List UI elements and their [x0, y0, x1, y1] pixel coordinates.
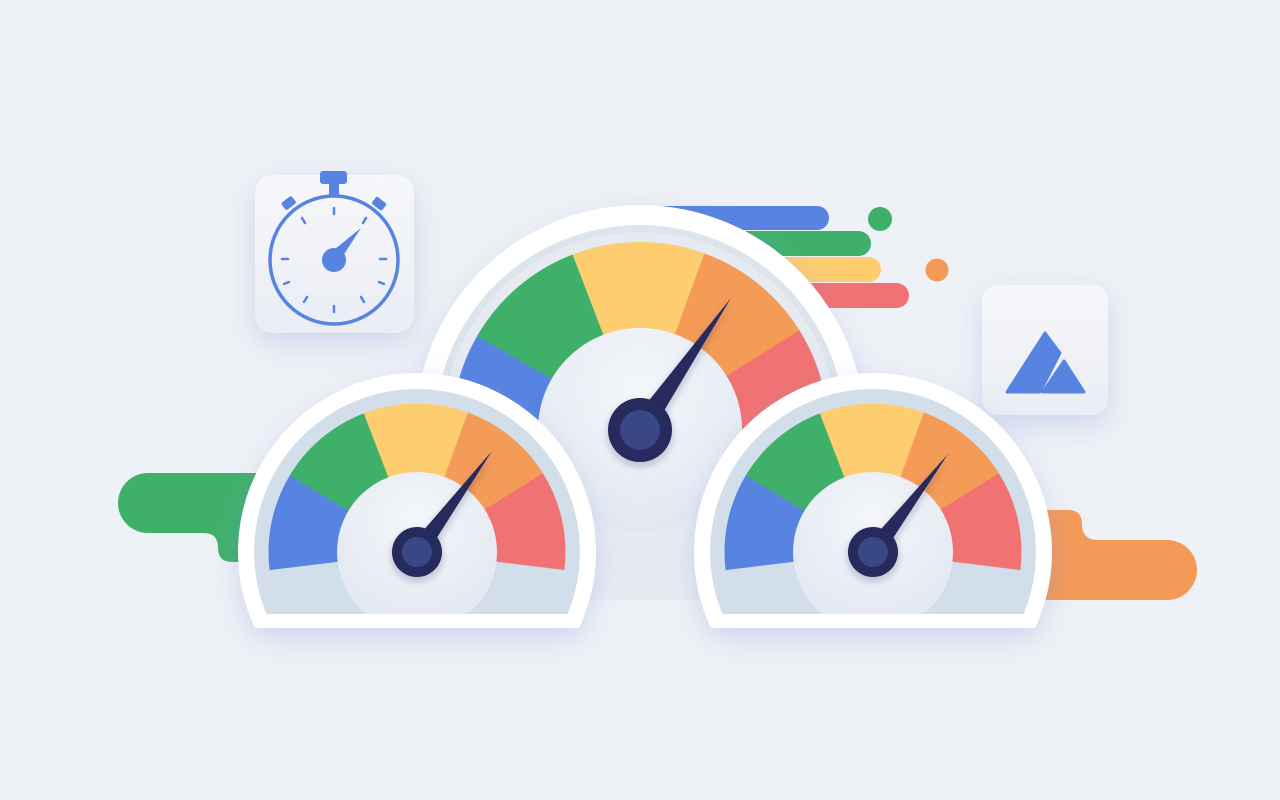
- speed lines: [640, 206, 948, 308]
- big gauge: [416, 205, 864, 532]
- orange blob right: [1020, 510, 1197, 600]
- icon tile: triangles: [982, 285, 1108, 415]
- icon tile: stopwatch: [255, 171, 414, 333]
- left gauge: [229, 373, 604, 648]
- right gauge: [686, 373, 1062, 648]
- green blob left: [118, 473, 265, 562]
